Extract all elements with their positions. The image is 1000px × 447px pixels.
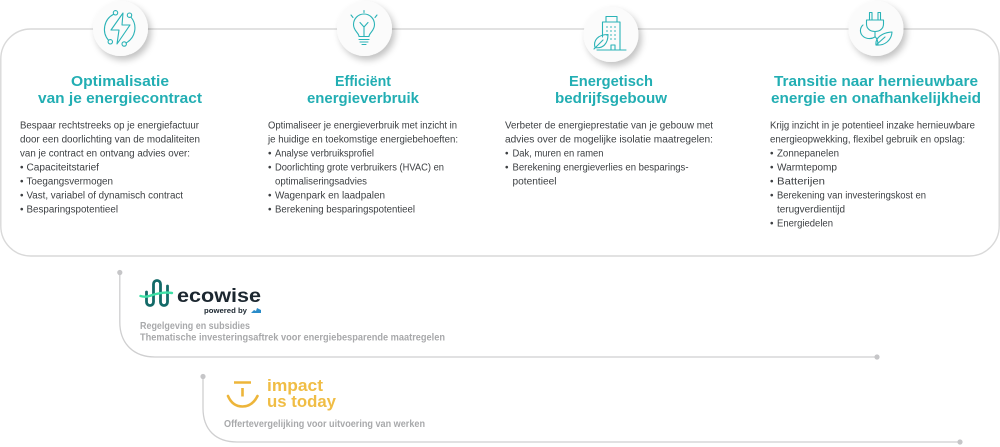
text: efficient use: Analyse verbruiksprofiel <box>275 148 374 160</box>
text: energy contract: Vast, variabel of dynamisch contract <box>26 190 183 202</box>
text: transition: Krijg inzicht in je potentieel inzake hernieuwbare <box>770 120 975 132</box>
text: transition: • <box>770 190 774 202</box>
icon: light bulb <box>337 1 392 56</box>
text: energy contract: • <box>20 162 24 174</box>
text: building: • <box>505 162 509 174</box>
heading: transition: energie en onafhankelijkheid <box>771 91 981 107</box>
logo: ecowise: ecowise <box>177 286 261 307</box>
text: impact services: Offertevergelijking voor uitvoering van werken <box>224 419 425 430</box>
text: energy contract: van je contract en ontvang advies over: <box>20 148 190 160</box>
text: energy contract: • <box>20 204 24 216</box>
text: transition: • <box>770 162 774 174</box>
text: efficient use: optimaliseringsadvies <box>275 176 367 188</box>
connector: ecowise <box>117 270 880 360</box>
text: efficient use: je huidige en toekomstige energiebehoeften: <box>267 134 458 146</box>
text: transition: energieopwekking, flexibel gebruik en opslag: <box>770 134 965 146</box>
heading: efficient use: Efficiënt <box>335 74 391 90</box>
logo: impact us today <box>228 377 337 411</box>
text: building: advies over de mogelijke isolatie maatregelen: <box>505 134 713 146</box>
text: ecowise services: Regelgeving en subsidies <box>140 321 250 332</box>
text: transition: terugverdientijd <box>777 204 845 216</box>
text: transition: Berekening van investeringskost en <box>777 190 926 202</box>
text: efficient use: • <box>268 190 272 202</box>
text: energy contract: • <box>20 176 24 188</box>
text: efficient use: • <box>268 204 272 216</box>
text: efficient use: • <box>268 162 272 174</box>
icon: energy contract <box>93 1 148 56</box>
logo: impact us today: impact <box>267 377 324 395</box>
heading: energy contract: Optimalisatie <box>71 74 169 90</box>
text: efficient use: Doorlichting grote verbruikers (HVAC) en <box>275 162 444 174</box>
text: energy contract: Capaciteitstarief <box>26 162 99 174</box>
text: transition: Energiedelen <box>777 218 833 230</box>
text: efficient use: Berekening besparingspotentieel <box>275 204 415 216</box>
heading: efficient use: energieverbruik <box>307 91 420 107</box>
heading: building <box>555 74 668 107</box>
text: efficient use: Optimaliseer je energieverbruik met inzicht in <box>268 120 457 132</box>
heading: energy contract: van je energiecontract <box>38 91 202 107</box>
heading: building: bedrijfsgebouw <box>555 91 668 107</box>
text: building: • <box>505 148 509 160</box>
text: building: Berekening energieverlies en besparings- <box>512 162 688 174</box>
logo: ecowise <box>140 280 261 315</box>
icon: green building <box>584 7 638 62</box>
text: transition: Warmtepomp <box>777 162 837 174</box>
heading: efficient use <box>307 74 420 107</box>
text: energy contract: Bespaar rechtstreeks op je energiefactuur <box>20 120 200 132</box>
text: transition: Batterijen <box>777 176 825 188</box>
text: energy contract: Toegangsvermogen <box>26 176 113 188</box>
text: building <box>505 120 713 188</box>
text: building: Verbeter de energieprestatie van je gebouw met <box>505 120 713 132</box>
logo: ecowise: powered by <box>204 306 248 315</box>
heading: energy contract <box>38 74 202 107</box>
text: ecowise services <box>140 321 445 344</box>
text: energy contract <box>20 120 200 216</box>
text: ecowise services: Thematische investeringsaftrek voor energiebesparende maatregelen <box>140 332 445 344</box>
heading: building: Energetisch <box>569 74 653 90</box>
text: transition: • <box>770 218 774 230</box>
logo: impact us today: us today <box>267 393 337 411</box>
panel: services outline <box>1 29 999 256</box>
text: efficient use: Wagenpark en laadpalen <box>275 190 385 202</box>
text: energy contract: • <box>20 190 24 202</box>
heading: transition <box>771 74 981 107</box>
text: transition: • <box>770 148 774 160</box>
heading: transition: Transitie naar hernieuwbare <box>774 74 978 90</box>
text: transition: • <box>770 176 774 188</box>
text: building: potentieel <box>512 176 556 188</box>
text: transition <box>770 120 975 230</box>
text: building: Dak, muren en ramen <box>512 148 604 160</box>
text: energy contract: door een doorlichting van de modaliteiten <box>20 134 200 146</box>
text: efficient use: • <box>268 148 272 160</box>
connector: impact us today <box>200 374 963 445</box>
text: efficient use <box>267 120 458 216</box>
icon: plug and leaf <box>848 1 904 56</box>
text: energy contract: Besparingspotentieel <box>26 204 118 216</box>
text: transition: Zonnepanelen <box>777 148 839 160</box>
